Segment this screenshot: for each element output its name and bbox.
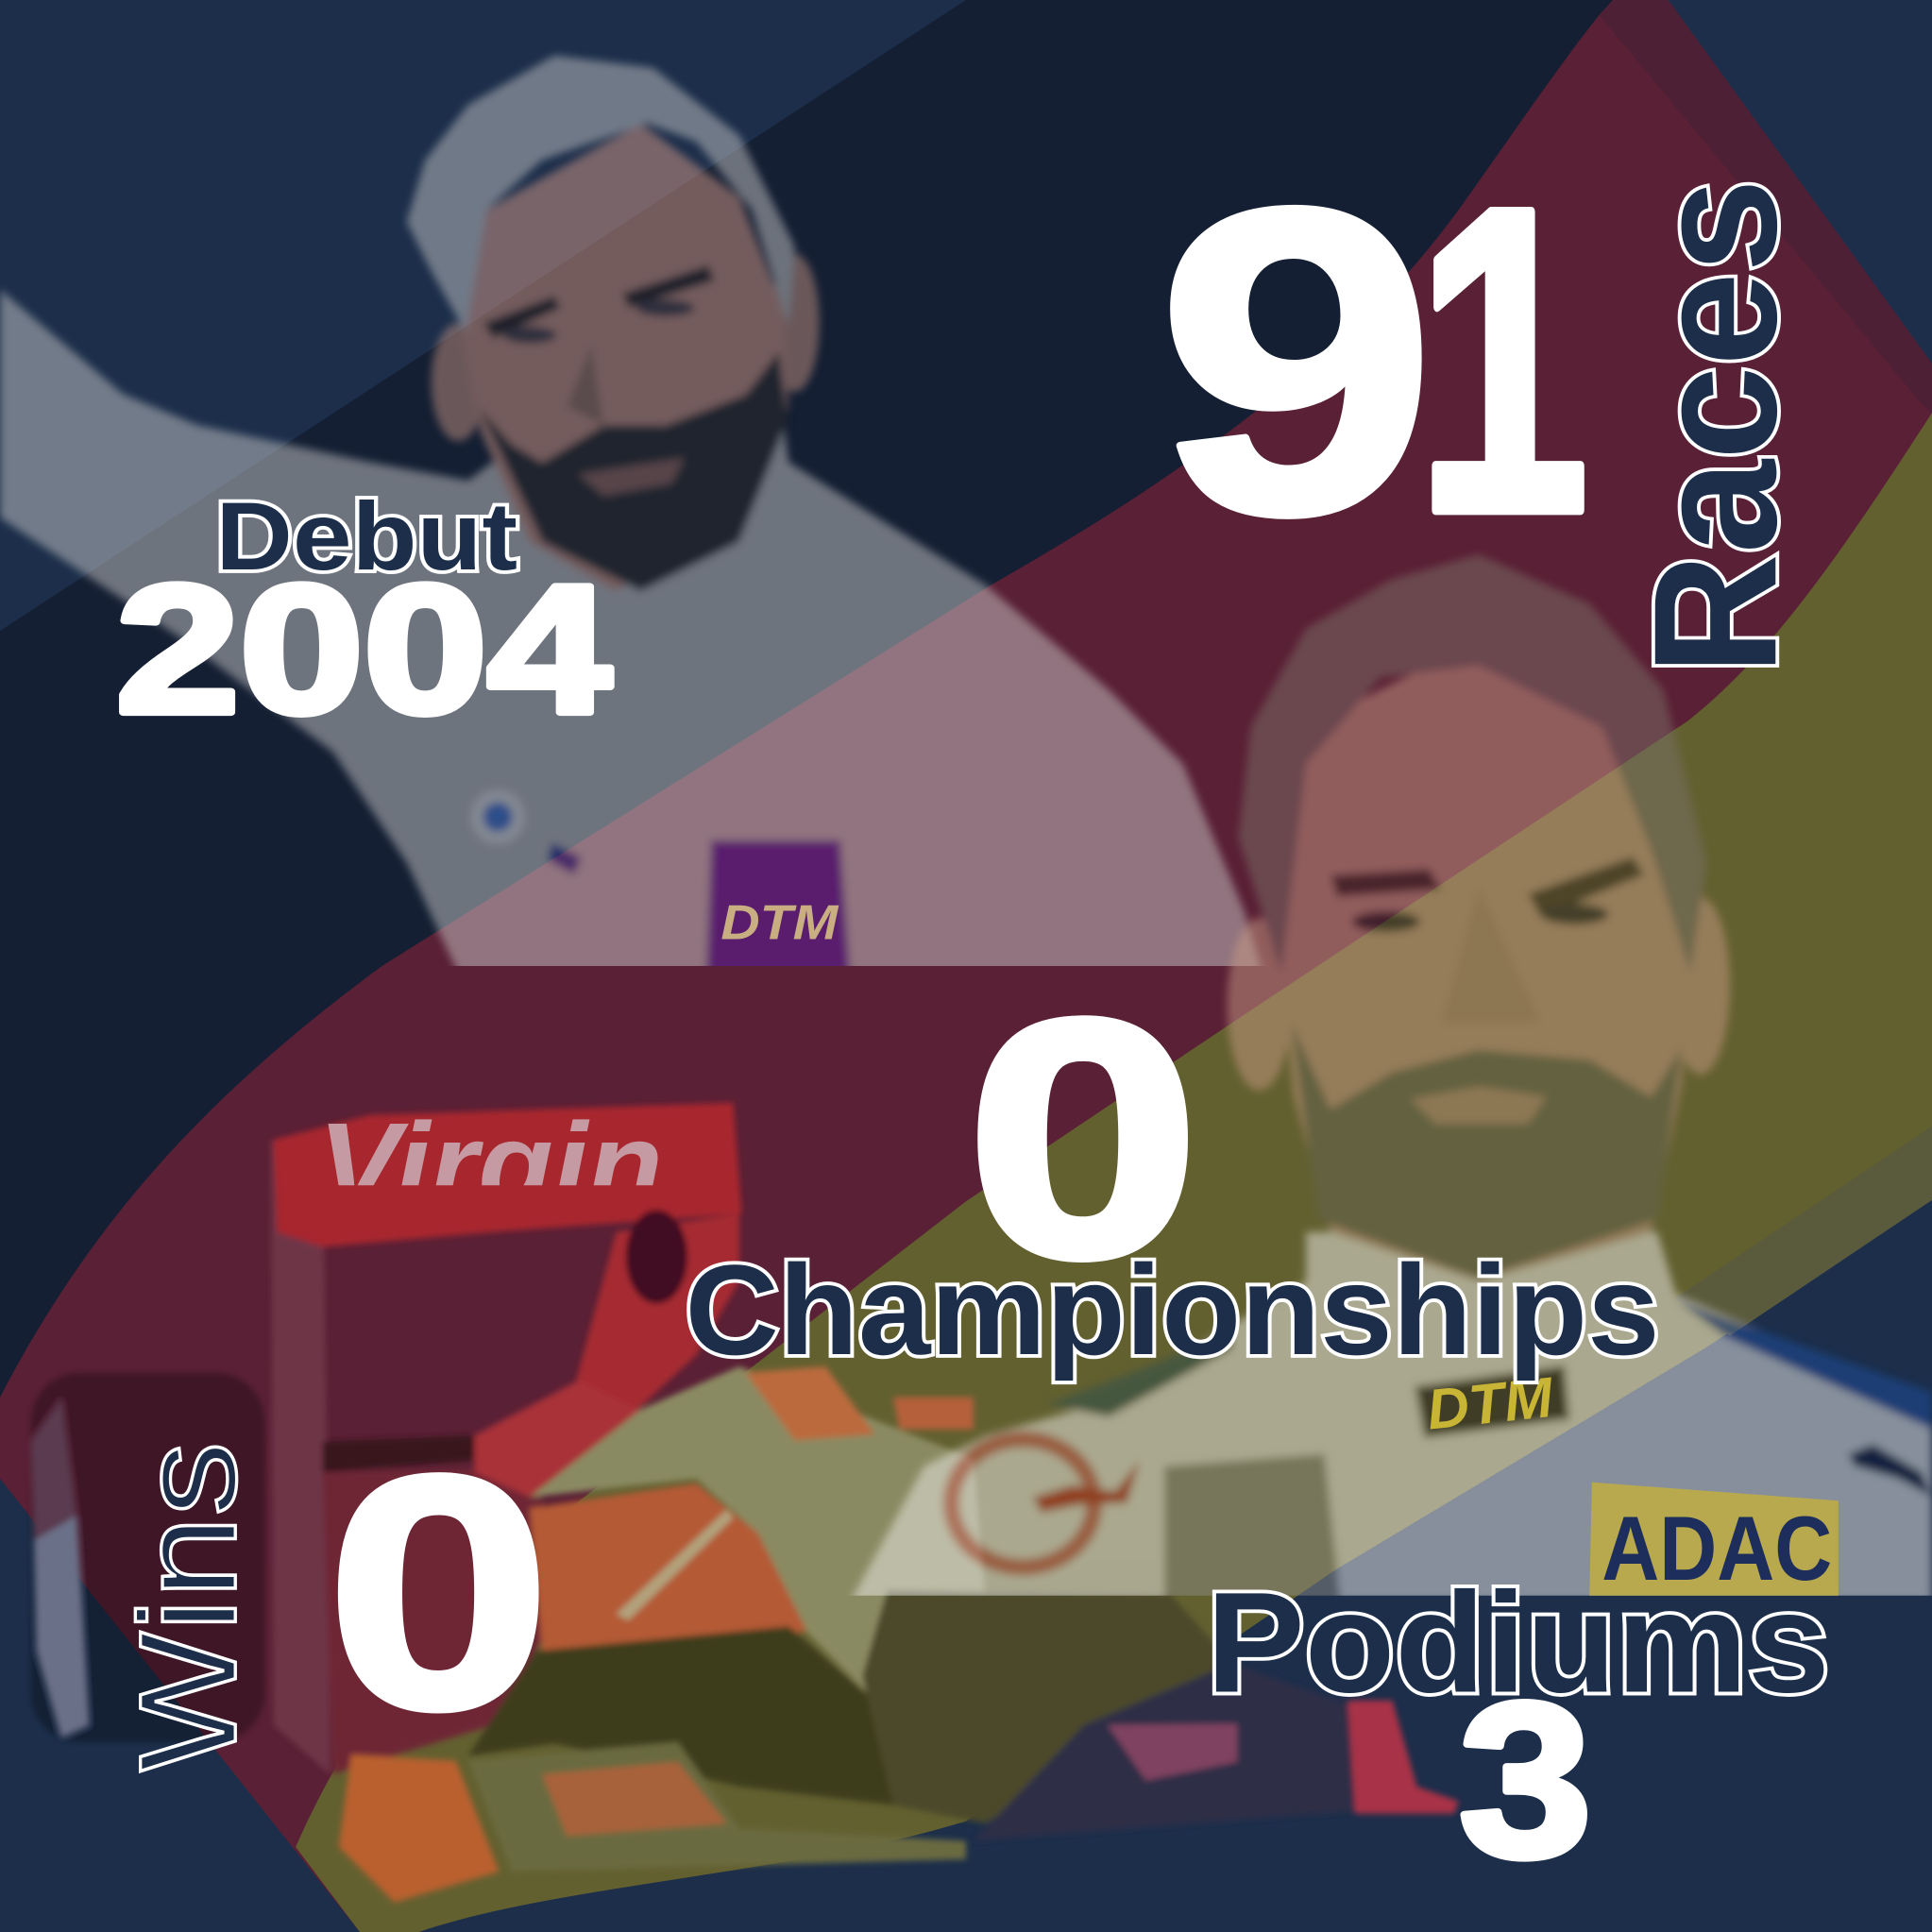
- stat: championships value: 0: [967, 952, 1199, 1326]
- stat: podiums value: 3: [1459, 1658, 1592, 1903]
- car: rear wing upright: [271, 1140, 330, 1774]
- stat: championships label: Championships: [685, 1238, 1660, 1381]
- car: cockpit and sidepod: [530, 1366, 986, 1713]
- driver 2: beard: [1291, 1023, 1682, 1279]
- driver 1: lips: [579, 458, 684, 496]
- stat: wins label: Wins: [110, 1442, 264, 1771]
- driver 2: logo on sleeve: [951, 1439, 1094, 1568]
- car: airbox: [493, 1213, 739, 1466]
- car: red end plate: [1348, 1701, 1459, 1814]
- driver 2: puma logo red: [1032, 1460, 1140, 1513]
- stat: races value: [1157, 118, 1589, 604]
- car: engine cover stripe: [616, 1509, 733, 1620]
- car: dark underside: [468, 1626, 893, 1805]
- stat: podiums label: Podiums: [1206, 1564, 1830, 1723]
- driver 2: lips and teeth: [1411, 1087, 1547, 1124]
- driver 1: brows: [483, 296, 561, 339]
- driver 2: blue shoulder: [1676, 1300, 1932, 1430]
- driver 2: collar trim: [1047, 1330, 1232, 1417]
- stat: races value: 9: [1157, 119, 1436, 604]
- driver 2: ears: [1228, 918, 1291, 1091]
- car: rear wing: [274, 1103, 742, 1247]
- car: right bodywork: [862, 1589, 1232, 1823]
- driver 1: ears: [432, 323, 485, 441]
- driver 2: face: [1269, 641, 1694, 1281]
- stat: debut label: Debut: [215, 483, 517, 590]
- car: rear tyre: [31, 1373, 265, 1742]
- driver 1: face: [462, 123, 788, 591]
- stat: wins value: 0: [327, 1408, 551, 1777]
- photo: driver portrait: [850, 554, 1932, 1602]
- driver 2: puma logo navy: [1848, 1444, 1932, 1497]
- driver 2: collar badge: [1415, 1365, 1569, 1438]
- car: front wing: [468, 1742, 966, 1872]
- car: orange bodywork: [530, 1483, 807, 1651]
- driver 1: flag: [547, 843, 582, 874]
- driver 2: hair: [1238, 554, 1706, 974]
- car: sponsor wordmark: Virgin: [318, 1098, 663, 1230]
- driver 1: DTM patch label: DTM: [720, 895, 839, 950]
- photo: driver with raised arm: [0, 56, 1263, 974]
- driver 2: ADAC patch: [1589, 1483, 1839, 1596]
- driver 2: chest panel: [1164, 1454, 1341, 1602]
- driver 2: brows: [1330, 869, 1442, 897]
- driver 1: chest logo: [470, 789, 525, 844]
- car: lower rear structure: [323, 1435, 474, 1472]
- driver 2: ADAC label: ADAC: [1602, 1499, 1832, 1600]
- stat: races label: Races: [1618, 178, 1813, 675]
- driver 1: suit: [0, 290, 1263, 974]
- driver 1: beard: [478, 351, 788, 591]
- driver 2: DTM badge label: DTM: [1424, 1365, 1557, 1442]
- driver 2: suit: [850, 1232, 1932, 1602]
- stat: races value: 1: [1415, 118, 1589, 602]
- driver 1: DTM patch: [706, 840, 850, 974]
- stat: debut year: 2004: [116, 547, 611, 751]
- driver 2: eyes: [1351, 910, 1420, 933]
- driver 2: nose shade: [1442, 887, 1540, 1023]
- driver 1: hair: [407, 56, 795, 332]
- driver 1: nose shade: [568, 353, 604, 423]
- photo: race car: [31, 1103, 1459, 1903]
- driver 1: eyes: [502, 327, 557, 344]
